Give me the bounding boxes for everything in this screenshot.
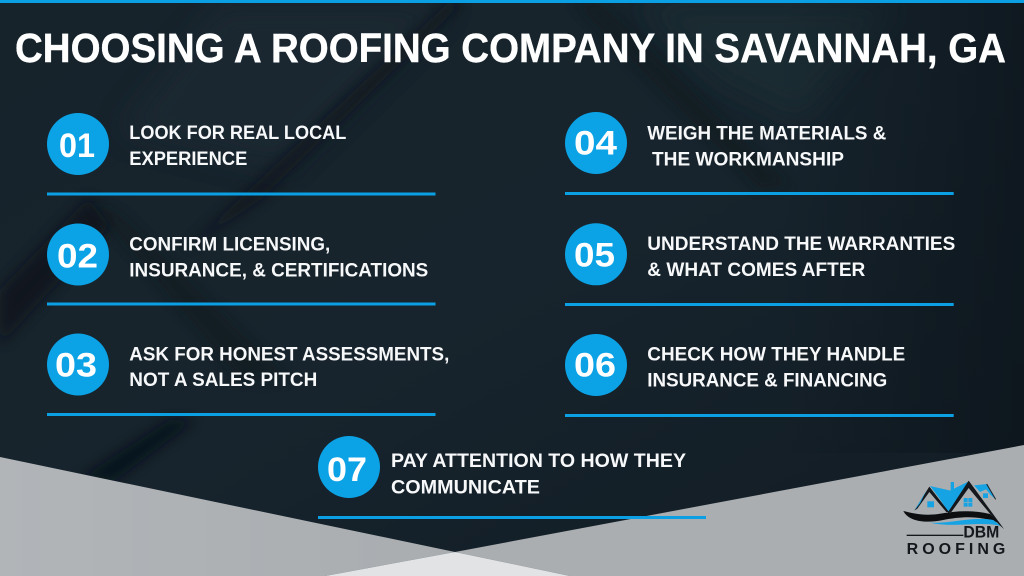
item 02: [47, 224, 436, 306]
badge 05: 05: [574, 237, 615, 275]
text 03: [129, 345, 449, 391]
item 04: [565, 112, 954, 195]
text 07: PAY ATTENTION TO HOW THEY: [391, 451, 686, 472]
badge 05: [565, 223, 627, 285]
text 06: [647, 345, 905, 392]
text 04: [647, 124, 887, 170]
text 01: [129, 123, 347, 170]
grey bottom left panel: [0, 457, 455, 576]
text 07: COMMUNICATE: [391, 478, 540, 498]
text 02: [129, 235, 428, 282]
divider 07: [318, 516, 706, 519]
item 03: [47, 334, 449, 416]
text 02: CONFIRM LICENSING,: [129, 235, 330, 256]
icon: left roof: [914, 487, 949, 512]
text 05: [647, 234, 955, 281]
grey bottom right panel: [455, 445, 1024, 576]
text 01: LOOK FOR REAL LOCAL: [129, 123, 347, 144]
text 04: THE WORKMANSHIP: [652, 149, 844, 170]
badge 04: [565, 112, 627, 174]
badge 02: [47, 224, 109, 286]
logo wordmark DBM: DBM: [963, 522, 999, 541]
icon: black wave: [903, 511, 999, 523]
divider 02: [47, 302, 436, 306]
text 07: [391, 451, 686, 498]
badge 01: [47, 113, 109, 175]
divider 05: [565, 303, 954, 306]
badge 01: 01: [59, 127, 95, 165]
badge 02: 02: [57, 238, 98, 276]
badge 06: [565, 334, 627, 396]
top accent bar: [0, 0, 1024, 3]
logo wordmark ROOFING: ROOFING: [907, 541, 1005, 558]
text 03: NOT A SALES PITCH: [129, 370, 317, 391]
text 03: ASK FOR HONEST ASSESSMENTS,: [129, 345, 449, 366]
icon: blue wave: [930, 519, 1001, 526]
badge 03: 03: [55, 346, 97, 384]
item 06: [565, 334, 954, 417]
text 04: WEIGH THE MATERIALS &: [647, 124, 887, 144]
text 06: INSURANCE & FINANCING: [647, 371, 887, 392]
badge 07: 07: [327, 451, 367, 489]
logo underline: [907, 535, 963, 536]
text 01: EXPERIENCE: [129, 149, 247, 170]
logo: DBM Roofing: [903, 481, 1005, 558]
text 05: & WHAT COMES AFTER: [647, 260, 866, 281]
divider 01: [47, 192, 436, 196]
light bottom centre triangle: [325, 552, 570, 576]
icon: blue roof: [930, 481, 969, 512]
badge 04: 04: [574, 124, 617, 162]
divider 06: [565, 414, 954, 417]
item 07: [318, 436, 706, 519]
text 06: CHECK HOW THEY HANDLE: [647, 345, 905, 366]
item 01: [47, 113, 436, 196]
icon: back house: [974, 484, 996, 499]
text 02: INSURANCE, & CERTIFICATIONS: [129, 261, 428, 282]
badge 06: 06: [574, 347, 616, 385]
icon: right roof: [948, 481, 1004, 529]
item 05: [565, 223, 955, 306]
text 05: UNDERSTAND THE WARRANTIES: [647, 234, 955, 255]
divider 03: [47, 413, 436, 416]
divider 04: [565, 192, 954, 195]
badge 03: [47, 334, 109, 396]
badge 07: [318, 436, 380, 498]
